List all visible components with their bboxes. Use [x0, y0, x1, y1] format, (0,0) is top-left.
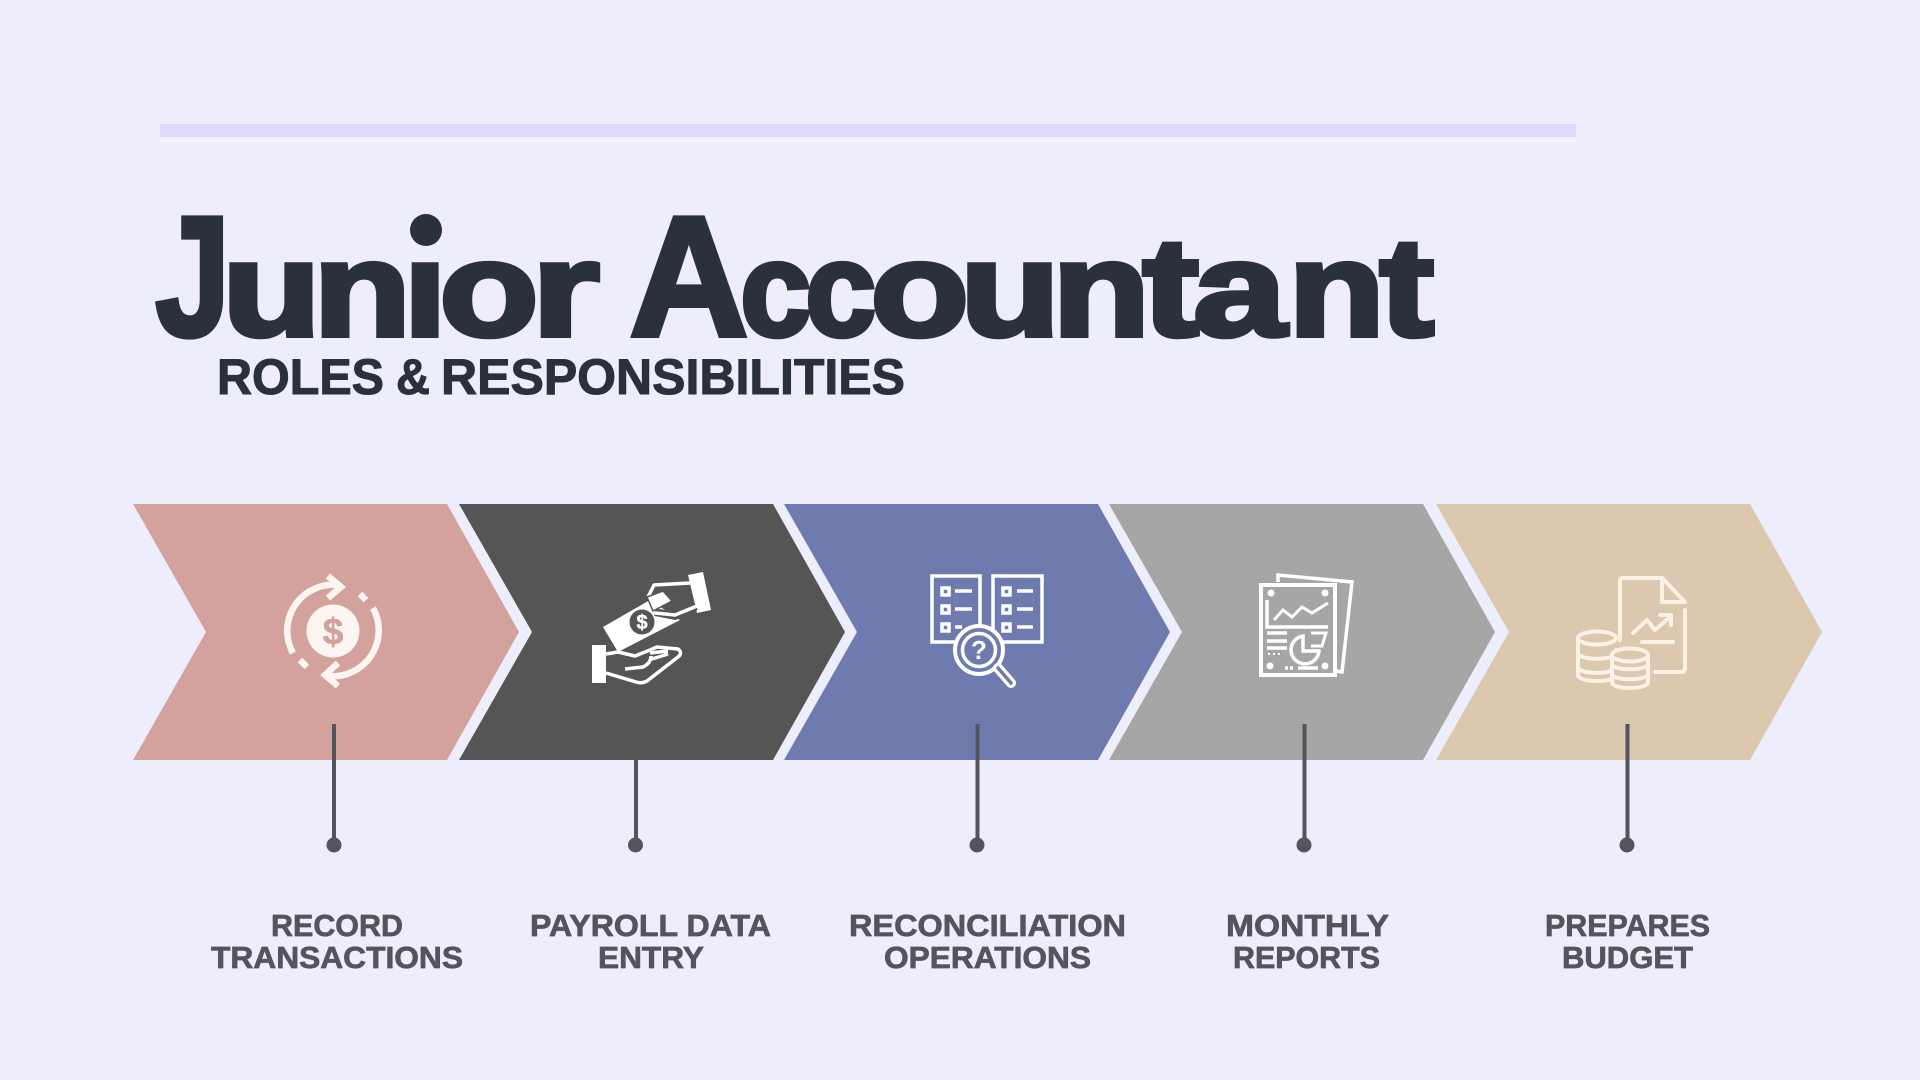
icon: report sheets with charts — [1261, 575, 1352, 675]
label: record transactions: RECORD — [271, 908, 403, 943]
label: reconciliation operations: RECONCILIATION — [849, 908, 1126, 943]
chevron: monthly reports — [1109, 504, 1495, 760]
label: prepares budget — [1545, 908, 1710, 975]
title: n — [1052, 216, 1150, 364]
icon: hands exchanging money: $ — [636, 612, 648, 634]
label: reconciliation operations: OPERATIONS — [884, 940, 1091, 975]
label: payroll data entry: PAYROLL DATA — [530, 908, 771, 943]
icon: hands exchanging money — [592, 572, 711, 683]
label: monthly reports: MONTHLY — [1226, 908, 1389, 943]
title: o — [440, 216, 538, 364]
title: t — [1143, 208, 1199, 366]
title: c — [805, 216, 876, 364]
label: reconciliation operations — [849, 908, 1126, 975]
connector 3 — [970, 724, 984, 852]
title: n — [314, 216, 411, 364]
title: n — [1289, 216, 1385, 364]
title: A — [629, 182, 748, 372]
label: monthly reports: REPORTS — [1233, 940, 1380, 975]
chevron: prepares budget — [1436, 504, 1822, 760]
label: payroll data entry: ENTRY — [598, 940, 704, 975]
title: u — [222, 216, 321, 364]
label: prepares budget: PREPARES — [1545, 908, 1710, 943]
connector 1 — [326, 724, 342, 852]
label: record transactions: TRANSACTIONS — [211, 940, 463, 975]
subtitle: RESPONSIBILITIES — [441, 349, 905, 405]
icon: dollar circular arrows: $ — [323, 611, 344, 652]
icon: checklists with magnifier: ? — [971, 635, 987, 665]
label: record transactions — [211, 908, 463, 975]
title: a — [1193, 216, 1288, 364]
title: u — [960, 216, 1060, 364]
title: t — [1380, 208, 1434, 366]
title: o — [871, 216, 969, 364]
subtitle: & — [396, 349, 430, 405]
label: monthly reports — [1226, 908, 1389, 975]
connector 2 — [628, 759, 643, 852]
connector 4 — [1296, 724, 1312, 852]
subtitle: ROLES — [217, 349, 384, 405]
chevron: payroll data entry — [459, 504, 845, 760]
label: prepares budget: BUDGET — [1562, 940, 1693, 975]
title: r — [532, 216, 600, 364]
connector 5 — [1620, 724, 1634, 852]
title: i — [404, 216, 447, 364]
icon: dollar circular arrows — [287, 576, 379, 686]
chevron: reconciliation operations — [784, 504, 1170, 760]
chevron: record transactions — [133, 504, 519, 760]
icon: checklists with magnifier — [932, 576, 1042, 683]
title — [155, 182, 1434, 372]
icon: budget document with coins — [1578, 578, 1685, 688]
label: payroll data entry — [530, 908, 771, 975]
top accent bar — [160, 124, 1576, 137]
title: c — [740, 216, 811, 364]
title: J — [155, 182, 230, 372]
